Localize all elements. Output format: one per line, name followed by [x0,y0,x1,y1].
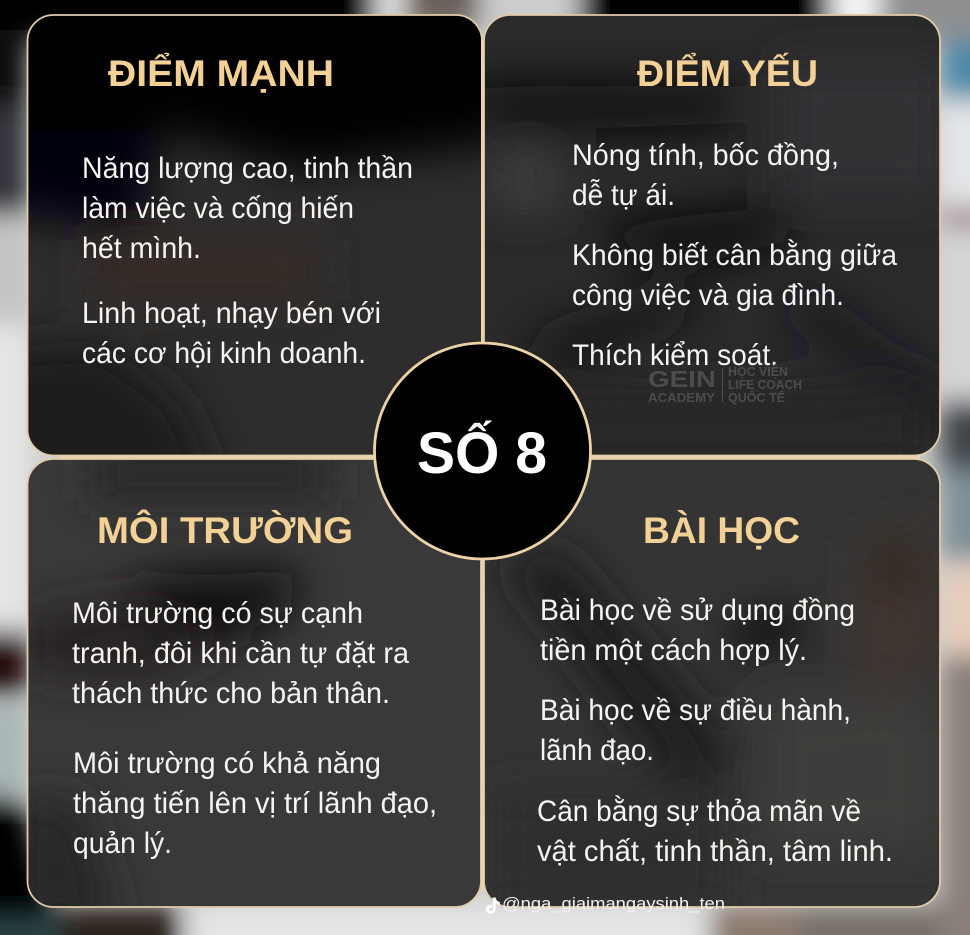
text: bài học body [537,594,893,868]
text: bài học body: lãnh đạo. [540,734,654,767]
text: điểm mạnh body: Linh hoạt, nhạy bén với [82,297,381,330]
text: bài học body: vật chất, tinh thần, tâm linh. [537,835,893,868]
heading: điểm yếu: ĐIỂM YẾU [637,52,818,94]
watermark: GEIN Academy: LIFE COACH [728,378,802,392]
text: bài học body: Cân bằng sự thỏa mãn về [537,795,861,828]
center circle: số 8: SỐ 8 [417,421,547,486]
text: môi trường body: quản lý. [73,827,172,860]
watermark: GEIN Academy: GEIN [648,366,716,392]
panel: bài học [484,459,945,910]
watermark: GEIN Academy: QUỐC TẾ [728,390,785,405]
text: điểm yếu body: Không biết cân bằng giữa [572,239,897,272]
watermark: GEIN Academy: HỌC VIỆN [728,364,788,379]
text: điểm mạnh body: các cơ hội kinh doanh. [82,337,366,370]
text: điểm mạnh body [82,152,413,370]
panel: môi trường [10,450,481,930]
text: môi trường body: thăng tiến lên vị trí lãnh đạo, [73,787,437,820]
text: điểm mạnh body: hết mình. [82,232,201,265]
heading: môi trường: MÔI TRƯỜNG [97,509,353,551]
watermark: GEIN Academy [648,364,802,405]
text: môi trường body [72,597,437,860]
tiktok handle: @nga_giaimangaysinh_ten [502,894,725,913]
text: điểm mạnh body: làm việc và cống hiến [82,192,354,225]
text: điểm yếu body: Nóng tính, bốc đồng, [572,139,839,172]
heading: điểm mạnh: ĐIỂM MẠNH [108,52,334,94]
text: điểm yếu body: dễ tự ái. [572,179,675,212]
text: bài học body: Bài học về sự điều hành, [540,694,851,727]
panel: điểm yếu [470,15,960,470]
text: môi trường body: Môi trường có khả năng [73,747,381,780]
panel: điểm mạnh [26,14,483,456]
text: bài học body: Bài học về sử dụng đồng [540,594,855,627]
text: điểm yếu body [572,139,897,372]
watermark: GEIN Academy: ACADEMY [648,390,715,405]
text: điểm yếu body: Thích kiểm soát. [572,339,778,372]
text: bài học body: tiền một cách hợp lý. [540,634,807,667]
heading: bài học: BÀI HỌC [643,510,800,551]
text: điểm mạnh body: Năng lượng cao, tinh thần [82,152,413,185]
text: điểm yếu body: công việc và gia đình. [572,279,844,312]
text: môi trường body: Môi trường có sự cạnh [72,597,363,630]
text: môi trường body: thách thức cho bản thân. [72,677,390,710]
text: môi trường body: tranh, đôi khi cần tự đặt ra [72,637,409,670]
